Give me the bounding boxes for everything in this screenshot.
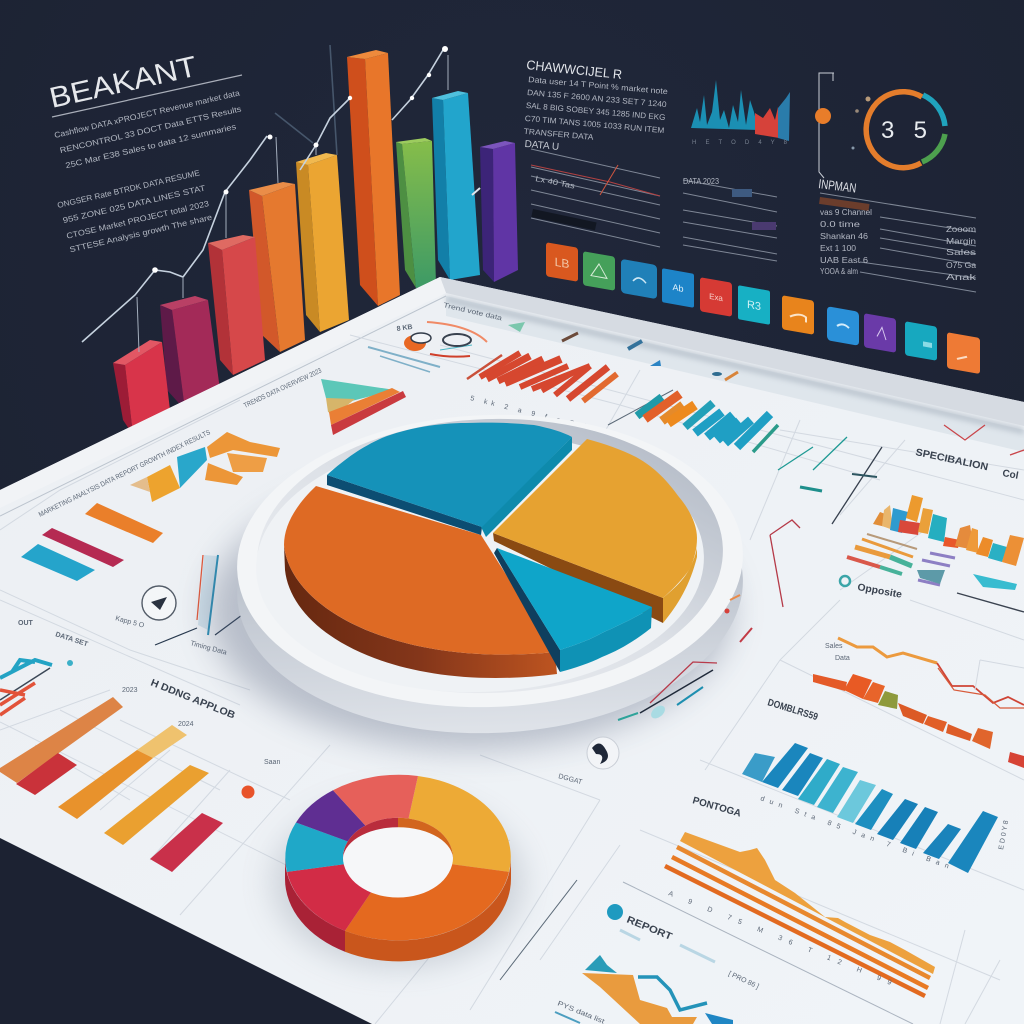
tile: blue (621, 259, 657, 299)
tile: sky blue (662, 268, 694, 308)
bar: green (396, 138, 436, 288)
table: right data rows: Sales (946, 248, 976, 257)
tile: orange: LB (555, 255, 569, 271)
bar: coral (208, 235, 265, 375)
chart: far-left mini lines (0, 620, 89, 715)
bar: magenta (160, 296, 220, 410)
slice: blue top (327, 423, 572, 537)
text block: channel details: C70 TIM TANS 1005 1033 RUN ITEM (524, 114, 665, 135)
heading: chart title: DOMBLRS59 (766, 697, 819, 723)
chart: center-left vertical lines: Timing Data (189, 640, 228, 657)
table: left data rows (531, 149, 660, 247)
chart: right line and bars: Sales (825, 643, 843, 650)
table: right data rows: Shankan 46 (820, 232, 869, 241)
strip: small items along sheet top: Trend vote data (443, 302, 503, 322)
chart: gauge ring (852, 92, 945, 168)
chart: orange band chart (665, 795, 965, 1024)
tile: amber (782, 295, 814, 335)
trend line (82, 46, 480, 352)
text block: intro: 25C Mar E38 Sales to data 12 summaries (65, 122, 237, 170)
chart: mini spike bars: H E T O D 4 Y 8 (692, 140, 788, 146)
chart: center-left vertical lines (155, 555, 242, 657)
text block: intro (53, 88, 248, 171)
label: chart caption: MARKETING ANALYSIS DATA REPORT GROWTH INDEX RESULTS (38, 429, 212, 519)
table: right data rows: O75 Ga (946, 261, 977, 270)
chart: 3D triangle (321, 379, 406, 435)
tile: green (583, 251, 615, 291)
chart: lower-left bar chart: Saan (264, 759, 280, 766)
table: right data rows: 0.0 time (820, 220, 861, 229)
text block: intro: RENCONTROL 33 DOCT Data ETTS Results (59, 104, 242, 155)
chart: right grouped bars (847, 447, 1024, 612)
tile: teal: R3 (747, 299, 761, 313)
table: right data rows: Anak (946, 273, 978, 282)
tile: teal (738, 285, 770, 325)
donut side wall (285, 858, 511, 961)
icon: small ring (840, 576, 850, 586)
table: right data rows: vas 9 Channel (820, 208, 872, 217)
plate shadow (208, 470, 732, 750)
chart: right line and bars (813, 576, 1024, 768)
table: right data rows: UAB East 6 (820, 256, 869, 265)
heading: in plan: INPMAN (818, 176, 857, 196)
bar: amber (296, 153, 349, 332)
text block: channel details: Data user 14 T Point % market note (528, 75, 669, 96)
text block: notes (56, 168, 214, 255)
text block: channel details: DAN 135 F 2600 AN 233 SET 7 1240 (527, 88, 668, 109)
panel: white report sheet (0, 277, 1024, 1024)
tile: sky blue: Ab (673, 282, 683, 294)
table: right data rows: YOOA & alm (820, 267, 858, 276)
bar: red (113, 340, 170, 435)
table: right data rows (819, 193, 978, 292)
strip: small items along sheet top (443, 302, 738, 380)
tile: purple (864, 313, 896, 353)
icon row: colored tiles (546, 242, 980, 374)
chart: left upper area chart (21, 429, 280, 581)
chart: far-left mini lines: DATA SET (54, 631, 89, 649)
text block: channel details: TRANSFER DATA (523, 127, 595, 142)
segment: salmon (333, 775, 418, 826)
icon: circle badge: Kapp 5 O (114, 615, 145, 630)
heading: chart title: SPECIBALION (914, 447, 989, 473)
chart: 3D bar chart (82, 45, 518, 435)
bar: crimson (42, 528, 124, 567)
bar: orange (249, 182, 305, 352)
chart: pie on white plate (208, 406, 748, 750)
chart: blue and orange slanted bars (608, 390, 778, 452)
text block: channel details (522, 75, 669, 162)
chart: red slanted bars (467, 353, 617, 401)
text: red chart tick labels: 5 kk 2 a 9 f s 7 8 (470, 395, 588, 431)
title: BEAKANT (47, 51, 200, 115)
heading: chart title: REPORT (625, 915, 674, 943)
chart: orange band chart: A 9 D 75 M 36 T 12 H 99 (667, 890, 892, 987)
segment: blue (285, 823, 348, 872)
table: left data rows: Lx 40 Tas (535, 174, 576, 191)
chart: bottom area chart (555, 904, 760, 1024)
text block: notes: STTESE Analysis growth The share (69, 213, 214, 254)
bar: orange (85, 503, 163, 543)
chart: lower-left bar chart: 2023 (122, 687, 138, 694)
chart: sketch lines right of pie (618, 425, 1024, 721)
table: right data rows: Ext 1 100 (820, 244, 857, 253)
heading: chart title: PONTOGA (691, 795, 742, 820)
icon: orange marker and bracket (815, 73, 834, 178)
chart: blue bars: E D 0 Y 8 (998, 820, 1010, 850)
chart: blue bars: dun Sta 85 Jan 7 Bi Ban (759, 795, 950, 870)
plate rim (232, 406, 748, 742)
bar: blue (21, 544, 95, 581)
tile: orange (546, 242, 578, 282)
chart: top fan icon: 8 KB (396, 324, 413, 333)
chart: bottom area chart: [ PRO 86 ] (727, 970, 760, 991)
text: upper caption: TRENDS DATA OVERVIEW 2023 (243, 368, 323, 410)
chart: right line and bars: Data (835, 655, 850, 662)
donut hole (343, 818, 453, 898)
bar: tall orange (347, 50, 400, 306)
panel: right wall dashboard (522, 57, 980, 374)
bar: purple (480, 141, 518, 282)
text block: channel details: SAL 8 BIG SOBEY 345 1285 IND EKG (526, 101, 666, 122)
label: side note: Col (1001, 468, 1019, 482)
chart: mini spike bars (691, 80, 790, 146)
bar: blue (432, 91, 480, 280)
text block: channel details: DATA U (524, 139, 560, 153)
segment: red (287, 864, 372, 931)
chart: far-left mini lines: OUT (18, 620, 34, 627)
icon: small emblem and caption: DGGAT (557, 773, 584, 786)
text block: notes: ONGSER Rate BTRDK DATA RESUME (56, 168, 201, 210)
chart: lower-left bar chart (0, 678, 290, 872)
heading: chart title: Opposite (856, 582, 903, 601)
segment: orange (345, 864, 509, 940)
slice: yellow (493, 439, 697, 623)
table: right data rows: Margin (946, 237, 976, 246)
guide lines behind bars (275, 45, 337, 155)
table: center data rows: DATA 2023 (683, 177, 719, 186)
chart: bottom area chart: PYS data list (556, 1000, 605, 1024)
tile: red (700, 277, 732, 317)
heading: channel: CHAWWCIJEL R (526, 57, 623, 82)
segment: purple (296, 790, 366, 842)
segment: yellow (408, 776, 511, 872)
panel: left wall heading and text (47, 51, 248, 255)
icon: small emblem and caption (557, 737, 619, 786)
icon: report badge (607, 904, 623, 920)
tile: light blue (827, 306, 859, 346)
slice: small blue (494, 548, 652, 672)
chart: lower-left bar chart: 2024 (178, 721, 194, 728)
tile: red: Exa (709, 292, 723, 303)
table: center data rows (683, 177, 777, 261)
tile: teal two (905, 321, 937, 361)
slice: orange (284, 486, 557, 678)
tile: coral (947, 332, 980, 374)
chart: donut (273, 775, 523, 968)
heading: chart title: H DDNG APPLOB (149, 678, 236, 721)
table: right data rows: Zooom (946, 225, 976, 234)
chart: top fan icon (368, 322, 487, 372)
text block: notes: 955 ZONE 025 DATA LINES STAT (62, 183, 206, 225)
text block: notes: CTOSE Market PROJECT total 2023 (66, 199, 210, 241)
chart: blue bars (742, 697, 1010, 873)
chart: gauge ring: 3 5 (881, 117, 927, 144)
text block: intro: Cashflow DATA xPROJECT Revenue market data (53, 88, 241, 140)
icon: circle badge (114, 586, 176, 630)
